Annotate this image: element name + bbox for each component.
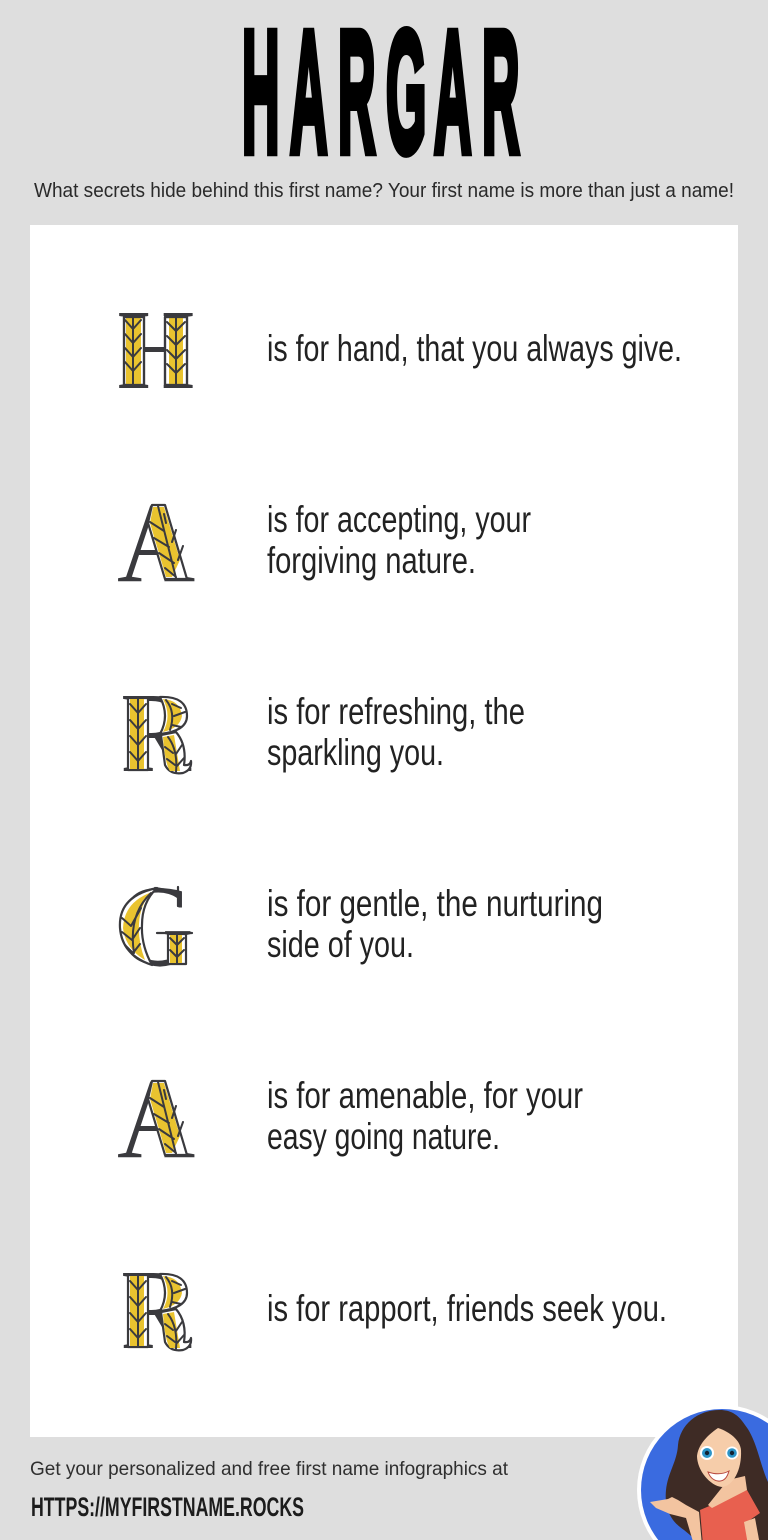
text: A line [267, 1075, 583, 1157]
avatar [637, 1405, 768, 1540]
icon: wheat letter R: R [120, 1246, 192, 1373]
row: R second [120, 1246, 667, 1373]
icon: wheat letter A: A [117, 481, 195, 607]
row: G [118, 862, 603, 989]
icon: wheat letter R: R [120, 669, 192, 796]
row: H [116, 288, 682, 413]
footer url: HTTPS://MYFIRSTNAME.ROCKS [31, 1492, 304, 1522]
icon: wheat letter A: A [117, 1057, 195, 1183]
hair [666, 1410, 768, 1540]
arm and hand [650, 1497, 702, 1540]
face [697, 1428, 741, 1487]
text: G line: is for gentle, the nurturing [267, 883, 603, 924]
text: G line [267, 883, 603, 965]
footer text: Get your personalized and free first name infographics at [30, 1458, 509, 1480]
row: A second [117, 1057, 583, 1183]
subtitle: What secrets hide behind this first name? Your first name is more than just a name! [34, 180, 734, 202]
neck [708, 1476, 747, 1508]
title: HARGAR [242, 0, 519, 189]
text: G line: side of you. [267, 924, 414, 965]
text: A line: forgiving nature. [267, 540, 476, 581]
text: R line: sparkling you. [267, 732, 444, 773]
text: A line: is for amenable, for your [267, 1075, 583, 1116]
text: R line: is for rapport, friends seek you. [267, 1288, 667, 1329]
shirt [700, 1490, 760, 1540]
text: R line [267, 691, 525, 773]
text: A line: easy going nature. [267, 1116, 500, 1157]
row: R [120, 669, 525, 796]
icon: wheat letter G: G [118, 862, 194, 989]
smile [708, 1471, 729, 1481]
eyes [700, 1446, 738, 1460]
panel: letters [30, 225, 738, 1437]
text: R line: is for refreshing, the [267, 691, 525, 732]
icon: wheat letter H: H [116, 288, 196, 413]
right arm [744, 1518, 760, 1540]
row: A [117, 481, 531, 607]
text: A line: is for accepting, your [267, 499, 531, 540]
text: A line [267, 499, 531, 581]
